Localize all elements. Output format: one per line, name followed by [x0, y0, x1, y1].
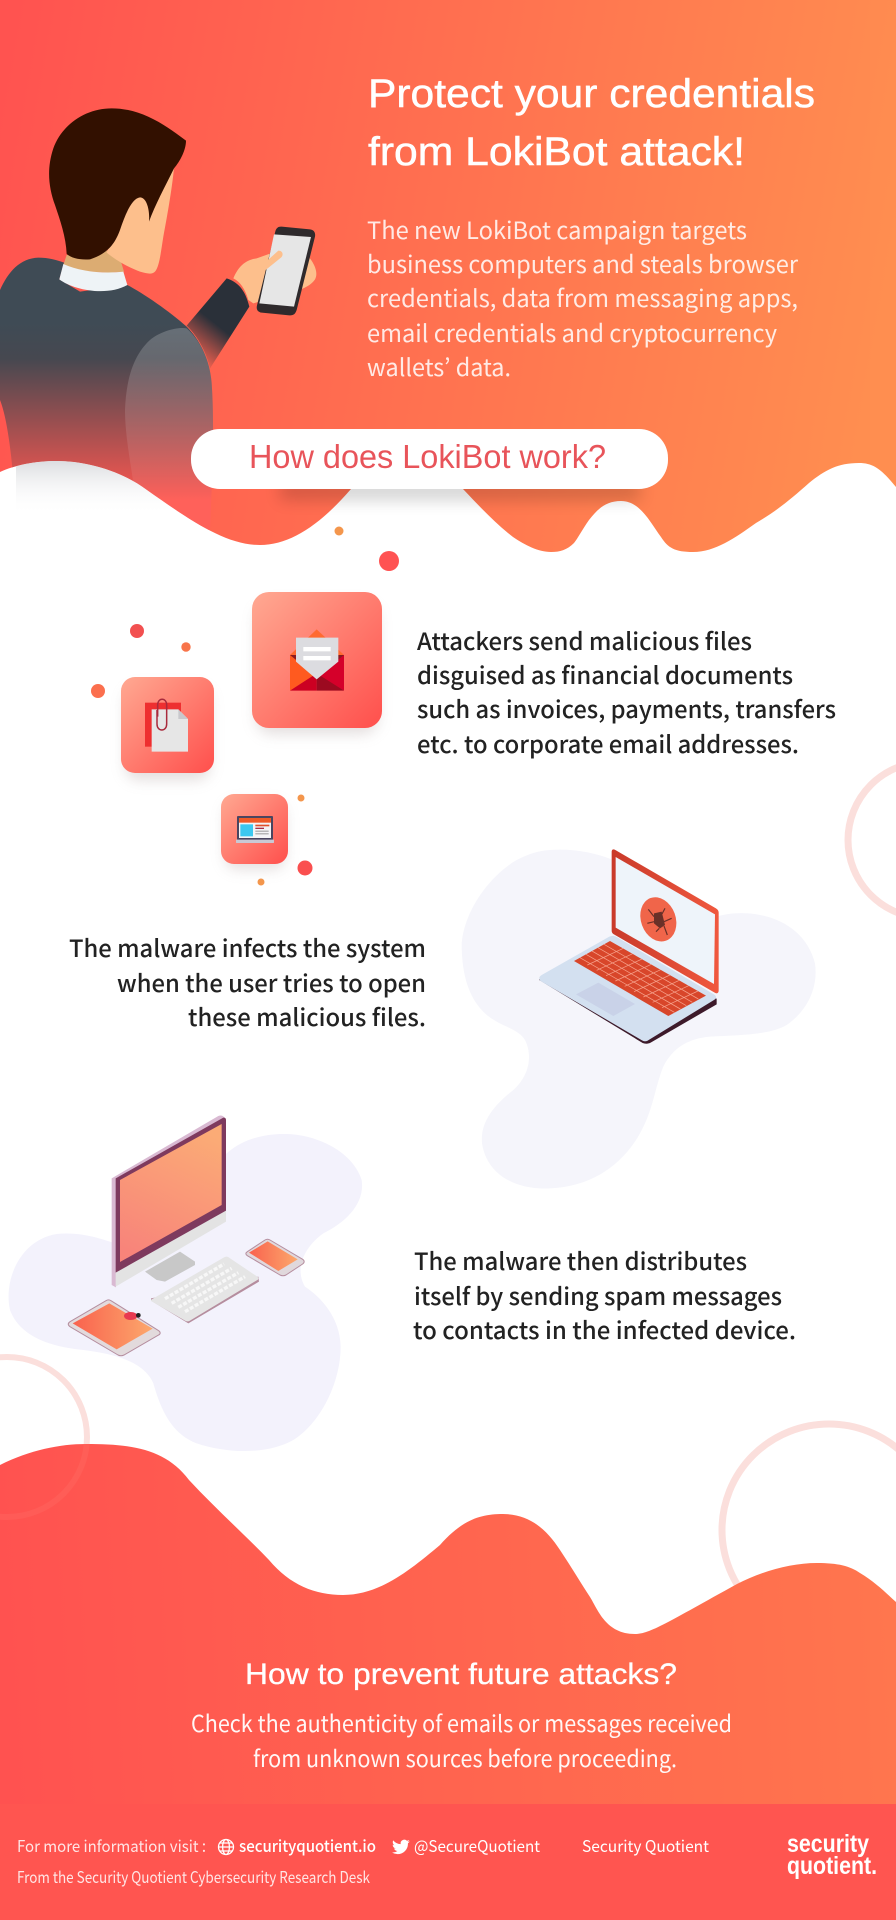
trackpad: [576, 983, 635, 1016]
phone: [246, 1239, 304, 1276]
bug on tablet: [124, 1312, 141, 1320]
faint ring overlay: [0, 1514, 16, 1520]
intro paragraph: The new LokiBot campaign targets: [367, 211, 747, 246]
laptop screen: [612, 849, 719, 993]
icon: laptop tile: [221, 794, 288, 869]
prevention heading: How to prevent future attacks?: [245, 1658, 677, 1691]
finger: [265, 251, 283, 270]
man hair: [49, 108, 186, 259]
man hand: [233, 251, 316, 303]
logo: quotient.: [787, 1852, 877, 1880]
laptop base: [539, 977, 717, 1044]
infected laptop illustration: [462, 849, 816, 1188]
keyboard: [151, 1257, 259, 1323]
step 2 text: when the user tries to open: [117, 964, 426, 999]
lower right ring: [722, 1424, 896, 1636]
step 2 text: The malware infects the system: [69, 929, 426, 964]
laptop deck: [539, 936, 716, 1041]
intro paragraph: wallets’ data.: [367, 348, 511, 383]
footer info: Security Quotient: [582, 1833, 709, 1857]
laptop blob: [462, 850, 816, 1188]
footer bar: [0, 1804, 896, 1920]
prevention text: [191, 1705, 732, 1774]
prevention text: Check the authenticity of emails or messages received: [191, 1705, 732, 1739]
decorative dots: [91, 526, 399, 886]
right ring: [848, 762, 896, 918]
step 1 text: [417, 622, 836, 760]
logo: security: [787, 1830, 869, 1858]
man collar: [59, 264, 127, 291]
bug icon: [634, 892, 682, 947]
step 1 text: Attackers send malicious files: [417, 622, 752, 657]
prevention text: from unknown sources before proceeding.: [253, 1740, 677, 1774]
footer info: @SecureQuotient: [414, 1833, 540, 1857]
step 2 text: these malicious files.: [188, 998, 426, 1033]
footer info: From the Security Quotient Cybersecurity Research Desk: [17, 1864, 370, 1888]
keyboard: [574, 941, 706, 1016]
header background wave: [0, 0, 896, 552]
desktop devices illustration: [9, 1115, 362, 1451]
step 3 text: to contacts in the infected device.: [413, 1311, 796, 1346]
man sleeve: [187, 278, 249, 368]
intro paragraph: email credentials and cryptocurrency: [367, 314, 777, 349]
headline: [368, 72, 815, 174]
monitor: [112, 1115, 226, 1287]
icon: envelope tile: [252, 592, 382, 734]
man neck: [63, 250, 124, 273]
icon: twitter bird: [392, 1840, 410, 1854]
intro paragraph: credentials, data from messaging apps,: [367, 279, 798, 314]
screen panel: [616, 857, 715, 984]
tablet: [68, 1300, 160, 1356]
phone screen: [259, 234, 311, 307]
headline: from LokiBot attack!: [368, 130, 745, 174]
pill shadow: [280, 480, 640, 500]
logo: [787, 1830, 877, 1880]
step 3 text: The malware then distributes: [414, 1242, 747, 1277]
intro paragraph: [367, 211, 799, 383]
phone: [257, 227, 315, 315]
footer info: [17, 1833, 709, 1888]
white wave shadow: [16, 461, 170, 506]
intro paragraph: business computers and steals browser: [367, 245, 799, 280]
monitor stand: [145, 1252, 195, 1282]
footer info: For more information visit :: [17, 1833, 206, 1857]
step 1 text: such as invoices, payments, transfers: [417, 690, 836, 725]
devices blob: [9, 1134, 362, 1451]
pill: how does LokiBot work: [191, 429, 668, 489]
icon: document tile: [121, 677, 214, 780]
step 3 text: [413, 1242, 796, 1346]
left ring: [0, 1357, 87, 1517]
headline: Protect your credentials: [368, 72, 815, 116]
bottom wave: [0, 1444, 896, 1810]
man body: [0, 258, 213, 530]
man face: [107, 168, 174, 274]
illustration: man holding phone: [0, 108, 316, 530]
step 1 text: etc. to corporate email addresses.: [417, 725, 799, 760]
pill: how does LokiBot work: How does LokiBot work?: [249, 438, 606, 475]
footer info: securityquotient.io: [239, 1833, 376, 1857]
step 1 text: disguised as financial documents: [417, 656, 793, 691]
icon: globe: [218, 1840, 234, 1854]
step 3 text: itself by sending spam messages: [414, 1277, 782, 1312]
step 2 text: [69, 929, 426, 1033]
man shoulder: [125, 328, 213, 530]
